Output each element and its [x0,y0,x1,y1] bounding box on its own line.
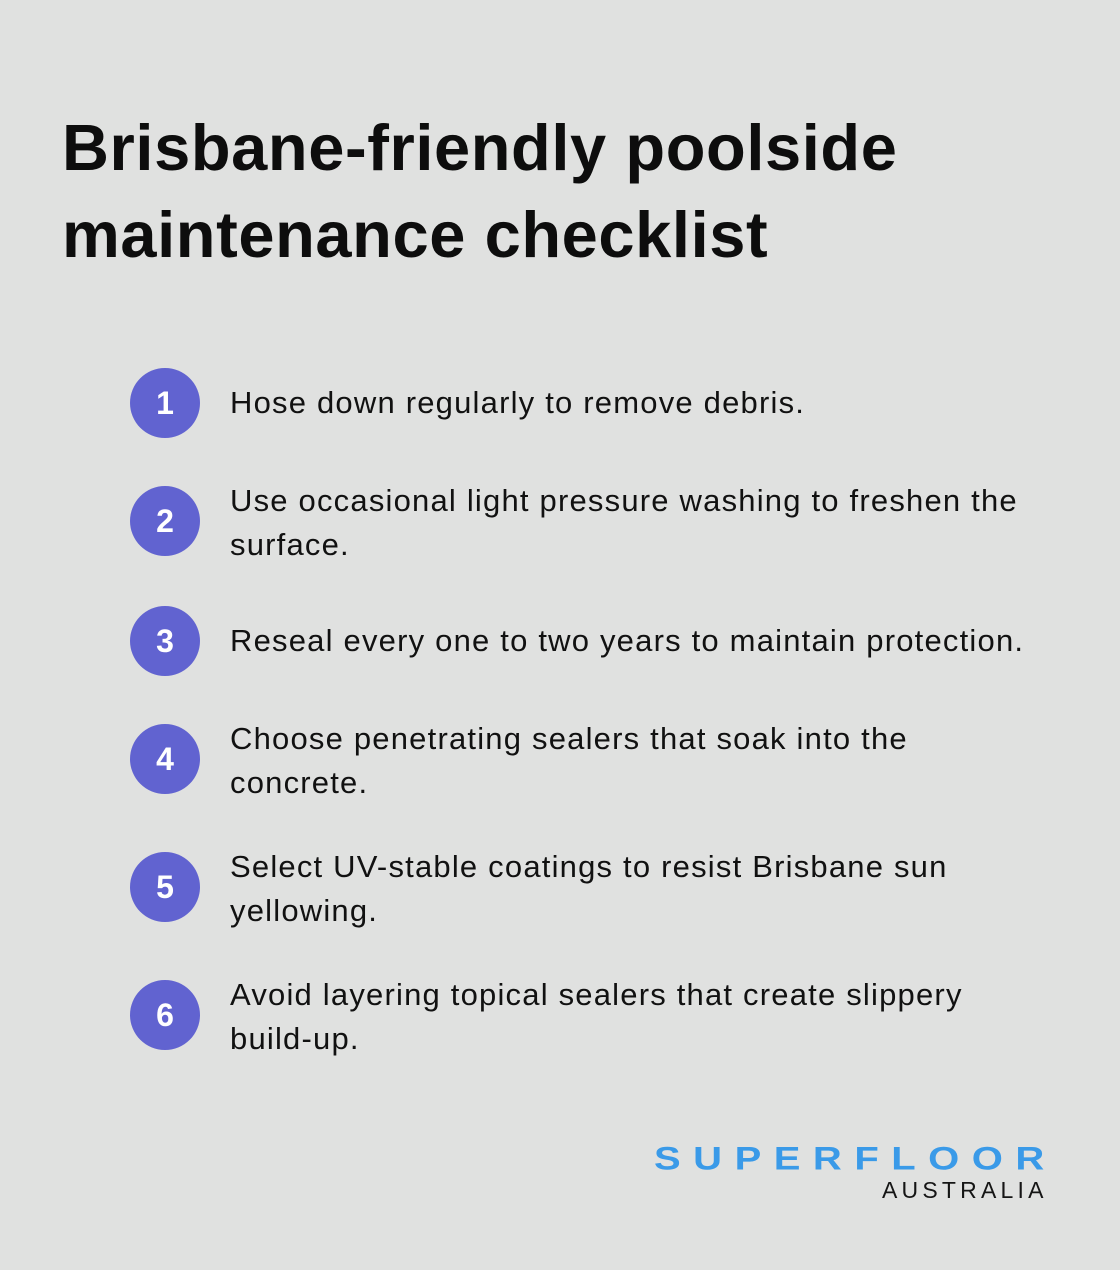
item 6: 6 [156,997,174,1033]
item 5: 5 [156,869,174,905]
logo: SUPERFLOOR [654,1141,1057,1177]
item 1 [130,368,805,438]
title: Brisbane-friendly poolside [62,111,897,184]
item 3 [130,606,1024,676]
item 4 [130,721,908,800]
item 2: 2 [156,503,174,539]
logo: AUSTRALIA [882,1177,1048,1203]
item 5: yellowing. [230,893,378,928]
item 6 [130,977,963,1056]
item 4: Choose penetrating sealers that soak into the [230,721,908,756]
item 1: 1 [156,385,174,421]
item 4: 4 [156,741,174,777]
item 2: surface. [230,527,350,562]
item 5 [130,849,948,928]
title [62,111,897,271]
item 5: Select UV-stable coatings to resist Brisbane sun [230,849,948,884]
item 1: Hose down regularly to remove debris. [230,385,805,420]
title: maintenance checklist [62,198,768,271]
item 3: 3 [156,623,174,659]
item 6: Avoid layering topical sealers that create slippery [230,977,963,1012]
logo [654,1141,1057,1203]
item 4: concrete. [230,765,368,800]
item 2 [130,483,1018,562]
item 3: Reseal every one to two years to maintain protection. [230,623,1024,658]
item 2: Use occasional light pressure washing to freshen the [230,483,1018,518]
item 6: build-up. [230,1021,360,1056]
